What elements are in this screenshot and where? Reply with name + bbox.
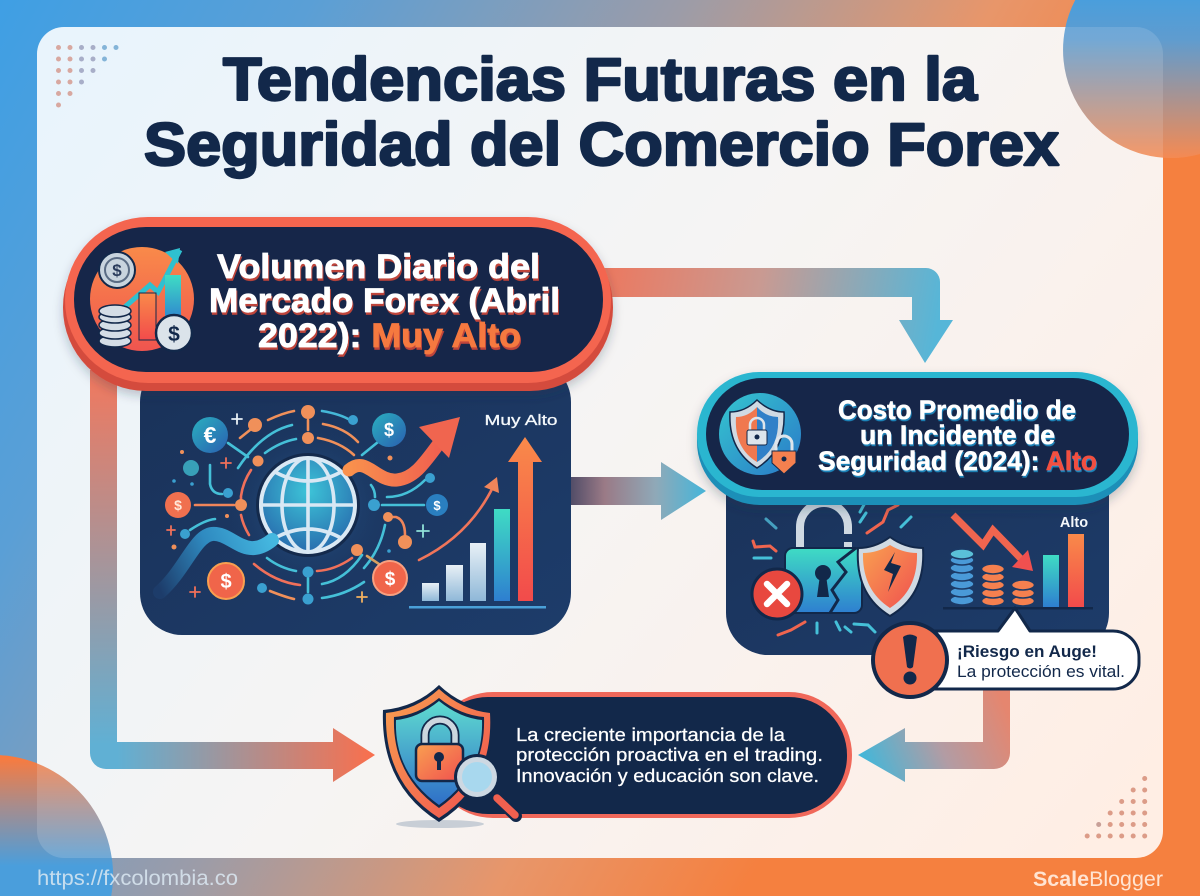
growth bars (409, 437, 546, 608)
coins (165, 413, 448, 599)
sparks (753, 497, 911, 635)
coins: $ (384, 420, 394, 440)
decorative corner circle: top right (1063, 0, 1200, 158)
broken padlock (785, 503, 862, 613)
panel: conclusion pill (430, 692, 852, 818)
coin stacks (943, 549, 1093, 610)
icon: coins and growth chart (90, 247, 194, 351)
heading: security cost header text: Costo Promedio de (838, 395, 1076, 425)
thin growth arrow (419, 477, 499, 560)
text: conclusion: Innovación y educación son clave. (516, 765, 819, 786)
arrow: middle, from market panel to cost panel (553, 462, 706, 520)
panel: security cost header pill (697, 372, 1138, 505)
footer: brand: ScaleBlogger (1033, 868, 1163, 891)
arrow: top, from volume header to cost header (600, 268, 953, 363)
callout text: ¡Riesgo en Auge! (957, 642, 1097, 661)
network nodes (172, 405, 435, 604)
footer: source url: https://fxcolombia.co (37, 867, 238, 890)
heading: security cost header text: un Incidente de (860, 420, 1055, 450)
warning icon (873, 623, 947, 697)
error badge (752, 569, 802, 619)
icon: coins and growth chart: $ (168, 323, 180, 346)
callout text: La protección es vital. (957, 662, 1125, 681)
coins: $ (433, 498, 441, 513)
label: Muy Alto: Muy Alto (484, 412, 558, 429)
text: conclusion: La creciente importancia de la (516, 724, 786, 745)
label: Alto: Alto (1060, 515, 1088, 531)
blue wave arrow (160, 534, 272, 592)
coins: $ (220, 571, 232, 593)
arrow: right, from cost callout to conclusion (858, 680, 1010, 782)
title: Seguridad del Comercio Forex (144, 111, 1059, 178)
sparkles (167, 414, 429, 602)
callout text (957, 642, 1125, 681)
orange wave arrow (349, 417, 460, 480)
cracked shield (858, 537, 923, 616)
text: conclusion (516, 724, 823, 786)
bubble (925, 608, 1139, 689)
heading: volume header text (209, 248, 560, 355)
coins: $ (385, 569, 396, 590)
icon: shield and locks (719, 393, 801, 475)
heading: volume header text: Mercado Forex (Abril (209, 282, 560, 320)
arrow: left, from volume header to conclusion (90, 370, 375, 782)
dot pattern: top left (56, 45, 118, 108)
text: conclusion: protección proactiva en el trading. (516, 744, 823, 765)
icon: coins and growth chart: $ (112, 261, 122, 280)
coins: $ (174, 497, 182, 513)
panel: market illustration (140, 360, 571, 635)
heading: security cost header text: Seguridad (2024): Alto (818, 446, 1097, 476)
panel: security cost illustration (726, 450, 1109, 655)
title: Tendencias Futuras en la (223, 46, 978, 113)
heading: volume header text: 2022): Muy Alto (258, 317, 521, 355)
callout: rising risk (873, 608, 1139, 697)
heading: security cost header text (818, 395, 1097, 476)
title (144, 46, 1059, 178)
falling arrow (953, 515, 1033, 571)
coins: € (204, 422, 217, 448)
bars (1043, 534, 1084, 607)
globe glow (223, 420, 393, 590)
network arcs (190, 411, 425, 599)
panel: volume header pill (63, 217, 613, 391)
globe (256, 453, 360, 557)
icon: shield, lock and magnifier (383, 685, 516, 828)
decorative corner circle: bottom left (0, 755, 113, 896)
dot pattern: bottom right (1085, 776, 1147, 838)
heading: volume header text: Volumen Diario del (217, 248, 540, 286)
